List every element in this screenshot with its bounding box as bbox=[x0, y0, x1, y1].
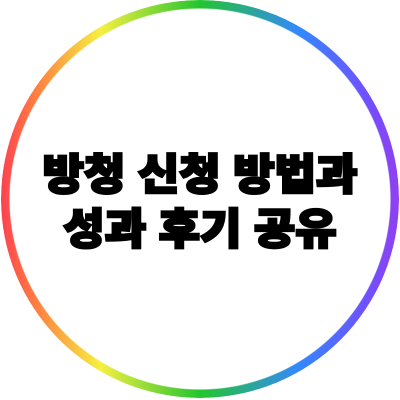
title: 방청 신청 방법과 bbox=[43, 151, 357, 199]
title: 성과 후기 공유 bbox=[63, 205, 337, 253]
title bbox=[43, 151, 358, 253]
